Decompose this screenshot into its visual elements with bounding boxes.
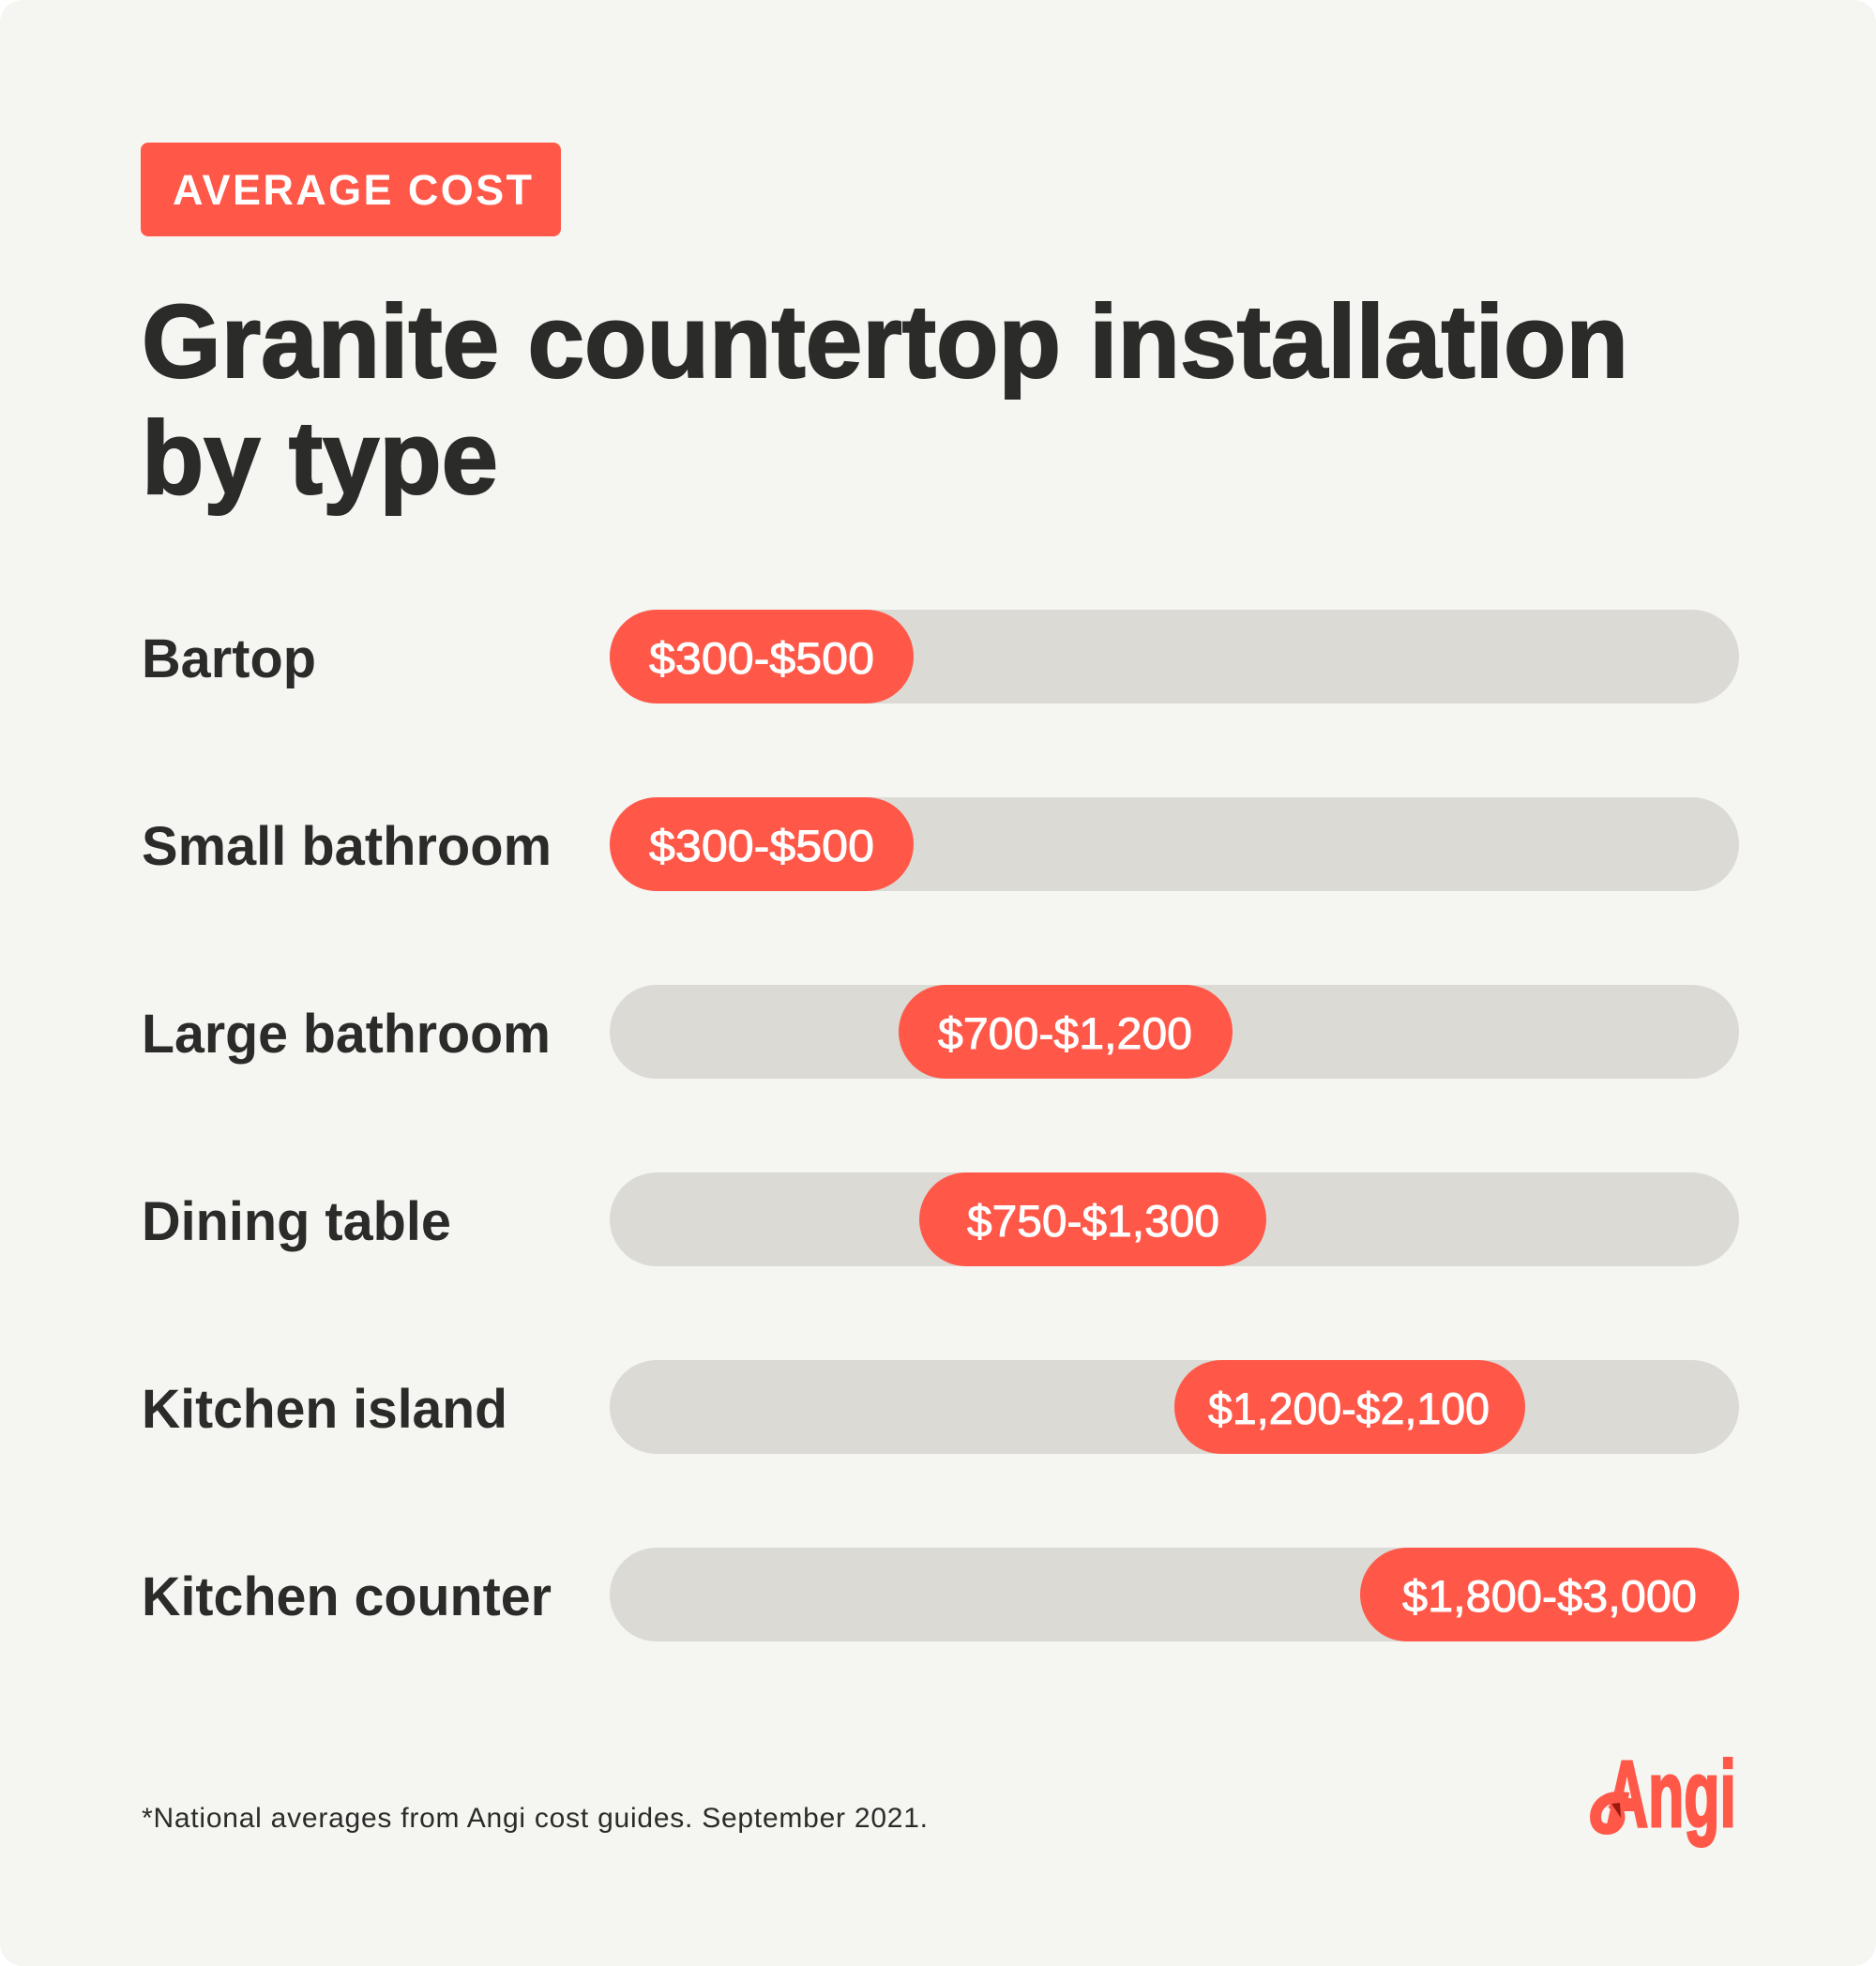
row: Kitchen counter [142, 1548, 1739, 1641]
row: Dining table: Dining table [142, 1191, 451, 1252]
row: Small bathroom [142, 797, 1739, 891]
row: Large bathroom: Large bathroom [142, 1004, 551, 1065]
row: Large bathroom [142, 985, 1739, 1079]
title: by type [142, 401, 498, 516]
title: Granite countertop installation [142, 284, 1628, 400]
row: Kitchen counter: $1,800-$3,000 [1402, 1571, 1697, 1621]
row: Small bathroom: $300-$500 [649, 821, 874, 870]
row: Large bathroom: $700-$1,200 [938, 1008, 1192, 1058]
row: Kitchen counter: Kitchen counter [142, 1566, 552, 1627]
row: Dining table [142, 1172, 1739, 1266]
row: Dining table: $750-$1,300 [967, 1196, 1219, 1246]
row: Kitchen island: $1,200-$2,100 [1208, 1384, 1490, 1433]
row: Bartop: Bartop [142, 628, 316, 689]
row: Kitchen island [142, 1360, 1739, 1454]
row: Bartop: $300-$500 [649, 633, 874, 683]
row: Kitchen island: Kitchen island [142, 1379, 507, 1440]
row: Small bathroom: Small bathroom [142, 816, 552, 877]
logo: Angi: Angi [1606, 1742, 1736, 1847]
badge: average cost [141, 143, 561, 236]
row: Bartop [142, 610, 1739, 703]
badge: average cost: AVERAGE COST [173, 166, 532, 214]
footnote: *National averages from Angi cost guides. September 2021. [142, 1803, 928, 1834]
